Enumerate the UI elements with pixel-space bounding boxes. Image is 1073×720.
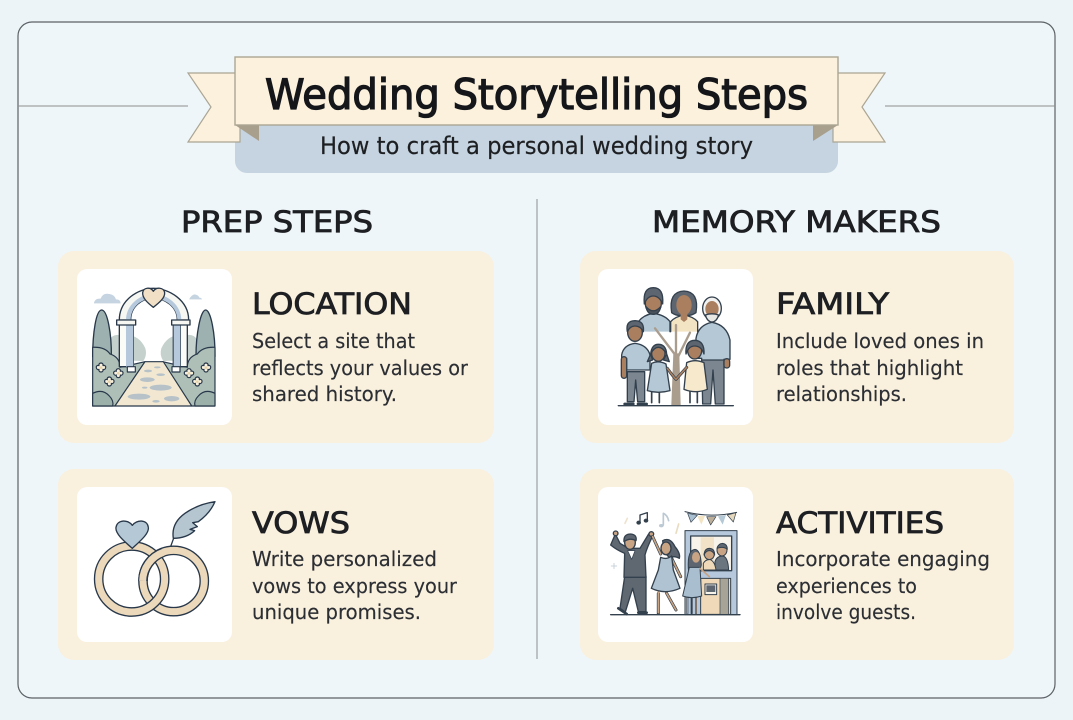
icon: garden arch (93, 288, 215, 406)
ribbon tail right (833, 73, 885, 142)
card body (252, 547, 458, 624)
card body (252, 329, 469, 406)
card title: FAMILY (776, 287, 890, 321)
card body: vows to express your (252, 574, 458, 598)
panel: activities (580, 469, 1014, 660)
icon: family group (618, 288, 733, 406)
card body: roles that highlight (776, 356, 963, 380)
card body: unique promises. (252, 600, 421, 624)
panel: family (580, 251, 1014, 443)
card body: reflects your values or (252, 356, 469, 380)
card body (776, 547, 990, 624)
card body (776, 329, 984, 406)
icon: rings and feather (99, 502, 215, 612)
card title: LOCATION (252, 287, 412, 321)
ribbon fold right (813, 125, 838, 141)
heading: prep steps: PREP STEPS (181, 205, 373, 239)
panel: vows (58, 469, 494, 660)
card body: relationships. (776, 382, 907, 406)
card body: experiences to (776, 574, 917, 598)
ribbon main (235, 57, 838, 125)
icon: dancing and photo booth (611, 512, 740, 615)
title banner (188, 57, 885, 173)
card title: ACTIVITIES (776, 506, 944, 540)
subtitle: How to craft a personal wedding story (320, 132, 753, 160)
title: Wedding Storytelling Steps (265, 70, 808, 119)
ribbon fold left (235, 125, 259, 141)
heading: memory makers: MEMORY MAKERS (652, 205, 941, 239)
panel: location (58, 251, 494, 443)
card body: Incorporate engaging (776, 547, 990, 571)
card body: involve guests. (776, 600, 916, 624)
card body: Include loved ones in (776, 329, 984, 353)
card body: shared history. (252, 382, 397, 406)
ribbon tail left (188, 73, 240, 142)
card body: Select a site that (252, 329, 415, 353)
subtitle band (235, 120, 838, 173)
card body: Write personalized (252, 547, 437, 571)
card title: VOWS (252, 506, 350, 540)
